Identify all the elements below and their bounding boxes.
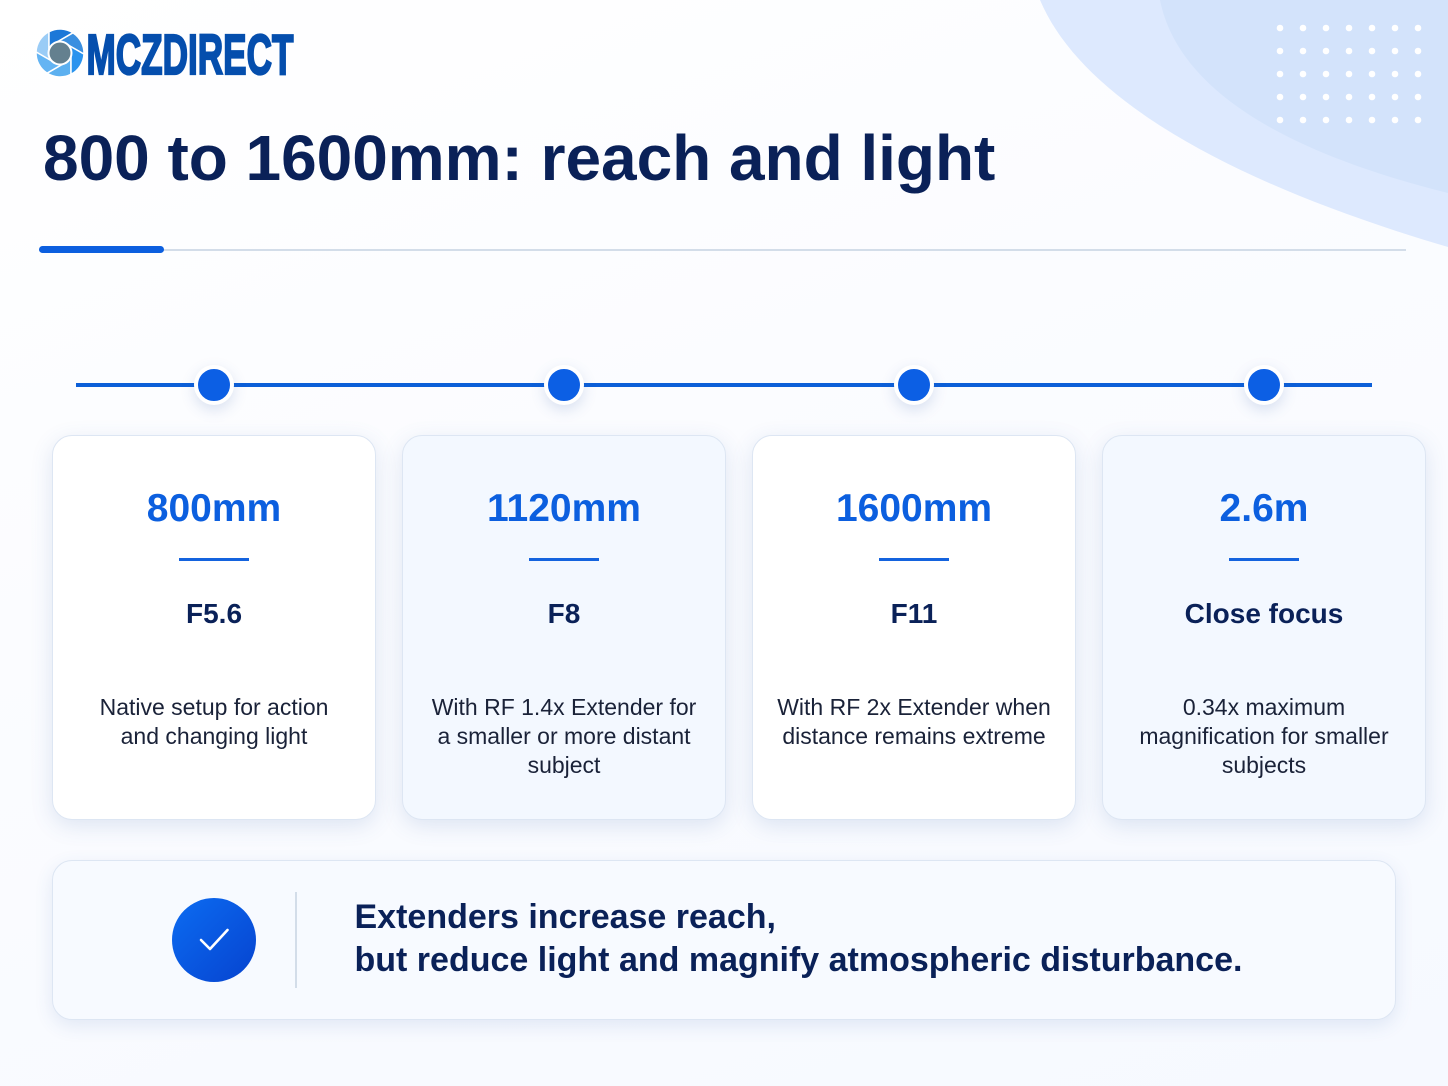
label: Close focus: [1185, 598, 1343, 629]
timeline dot 3: [894, 365, 934, 405]
timeline dot 1: [194, 365, 234, 405]
timeline dot 2: [544, 365, 584, 405]
logo: [36, 23, 294, 84]
aperture: F11: [891, 598, 937, 629]
icon: check mark: [172, 898, 256, 982]
callout text: but reduce light and magnify atmospheric disturbance.: [354, 941, 1242, 979]
description: and changing light: [121, 723, 307, 749]
value: 800mm: [147, 487, 281, 530]
timeline dot 4: [1244, 365, 1284, 405]
description: [1139, 694, 1389, 778]
description: subjects: [1222, 752, 1306, 778]
title divider: [39, 246, 1406, 253]
callout text: [354, 898, 1242, 979]
description: subject: [528, 752, 600, 778]
icon: camera shutter: [33, 29, 87, 77]
value: 1120mm: [487, 487, 641, 530]
panel: 1600mm: [752, 435, 1076, 820]
description: a smaller or more distant: [437, 723, 691, 749]
description: magnification for smaller: [1139, 723, 1389, 749]
description: 0.34x maximum: [1183, 694, 1345, 720]
callout text: Extenders increase reach,: [354, 898, 776, 936]
value: 2.6m: [1220, 487, 1308, 530]
description: distance remains extreme: [782, 723, 1046, 749]
description: With RF 1.4x Extender for: [432, 694, 696, 720]
timeline: [76, 383, 1372, 387]
aperture: F8: [548, 598, 580, 629]
description: [777, 694, 1051, 749]
callout: [52, 860, 1396, 1020]
decorative background curves: [1040, 0, 1448, 247]
description: [432, 694, 696, 778]
description: With RF 2x Extender when: [777, 694, 1051, 720]
description: [100, 694, 328, 749]
description: Native setup for action: [100, 694, 328, 720]
title: 800 to 1600mm: reach and light: [43, 122, 995, 194]
panel: 2.6m: [1102, 435, 1426, 820]
value: 1600mm: [836, 487, 992, 530]
aperture: F5.6: [186, 598, 242, 629]
panel: 1120mm: [402, 435, 726, 820]
panel: 800mm: [52, 435, 376, 820]
